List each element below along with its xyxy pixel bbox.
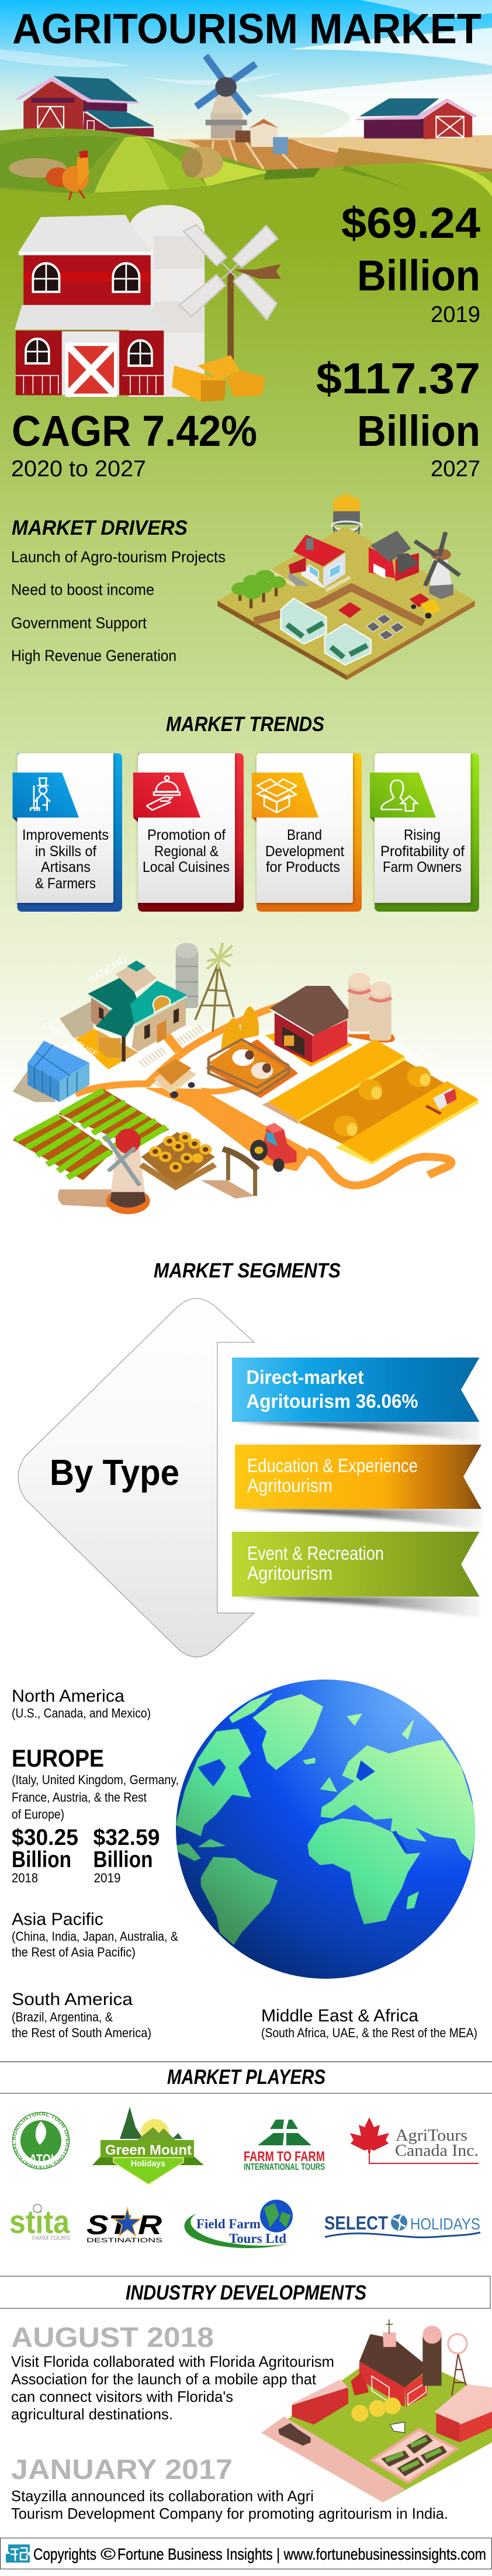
card text: for Products <box>266 859 340 875</box>
barn upper roof <box>18 215 152 252</box>
value 2019: $69.24 <box>341 199 480 247</box>
twin silos <box>348 973 395 1043</box>
logo: Farm to Farm: INTERNATIONAL TOURS <box>244 2162 325 2172</box>
card text: Brand <box>287 827 322 843</box>
region: asia pacific: (China, India, Japan, Australia, & <box>12 1929 178 1944</box>
greenhouse crops <box>287 623 367 657</box>
picket fences <box>141 1027 202 1064</box>
ribbon: direct-market: Direct-market <box>247 1366 364 1388</box>
logo: AgriTours Canada: AgriTours <box>396 2126 467 2145</box>
logo: Star Destinations: ST R <box>86 2210 162 2240</box>
region: europe: of Europe) <box>12 1807 64 1822</box>
card text: Improvements <box>22 827 109 843</box>
card text: Profitability of <box>380 843 465 860</box>
development: January 2017: JANUARY 2017 <box>11 2454 233 2485</box>
region: asia pacific: the Rest of Asia Pacific) <box>12 1945 136 1959</box>
grass plot <box>261 2347 492 2502</box>
heading: market trends: MARKET TRENDS <box>166 713 324 736</box>
region: middle east and africa <box>261 2006 477 2040</box>
cow <box>390 2422 405 2433</box>
wooden arch <box>201 1148 257 1199</box>
distant house <box>235 119 288 154</box>
europe value 2018: 2018 <box>12 1871 38 1885</box>
ribbon: education and experience: Education & Experience <box>247 1455 418 1476</box>
solar panels <box>366 614 405 640</box>
sunflower crate <box>141 1132 215 1187</box>
red tractor <box>351 2373 369 2395</box>
logo: Green Mount Holidays: Green Mount <box>105 2142 192 2158</box>
ribbon: direct-market <box>232 1358 479 1443</box>
region: middle east and africa: Middle East & Africa <box>261 2006 418 2026</box>
logo: Farm to Farm <box>244 2120 325 2172</box>
logo: Field Farm Tours: Tours Ltd <box>229 2231 286 2246</box>
hay rolls <box>9 147 223 178</box>
silo <box>129 205 205 397</box>
yellow tractor <box>410 593 441 619</box>
orange paths <box>75 1003 451 1186</box>
region: north america: (U.S., Canada, and Mexico) <box>12 1706 151 1720</box>
vegetable beds <box>12 1089 169 1180</box>
card face <box>375 753 471 903</box>
card back <box>18 753 122 912</box>
red barn <box>369 531 419 581</box>
illustration: small farm <box>261 2319 492 2502</box>
picket fence <box>270 571 350 590</box>
logo: Select Holidays: HOLIDAYS <box>410 2215 480 2233</box>
farm base <box>217 526 474 676</box>
logo: AgriTours Canada <box>350 2117 479 2163</box>
card text: Artisans <box>41 859 91 875</box>
water tower <box>332 493 362 550</box>
logo: Farm to Farm: FARM TO FARM <box>244 2149 325 2165</box>
region: south america <box>12 1990 151 2040</box>
dirt path <box>254 587 424 623</box>
card back <box>375 753 479 912</box>
hay rolls <box>351 2397 401 2422</box>
region: south america: the Rest of South America) <box>12 2026 151 2040</box>
clouds <box>0 0 492 138</box>
tag with person and house icon <box>370 773 436 822</box>
lattice windpump <box>195 943 234 1031</box>
ribbon: education and experience: Agritourism <box>247 1475 332 1496</box>
distant windmill <box>196 56 256 139</box>
foreground ground <box>0 163 492 236</box>
haystacks <box>221 1006 259 1050</box>
isometric farm illustration <box>217 493 474 680</box>
market drivers list: Need to boost income <box>11 581 154 598</box>
copyright text: © <box>101 2545 116 2563</box>
europe value 2019: Billion <box>93 1847 153 1872</box>
logo: AgriTours Canada: Canada Inc. <box>395 2141 479 2160</box>
pickup truck <box>278 2423 311 2446</box>
card text: Promotion of <box>147 827 226 843</box>
region: south america: (Brazil, Argentina, & <box>12 2010 113 2024</box>
white ground <box>12 1026 480 1206</box>
logo: Select Holidays: SELECT <box>324 2213 388 2234</box>
green hill <box>0 128 282 200</box>
region: asia pacific: Asia Pacific <box>12 1910 103 1929</box>
orchard <box>231 570 286 608</box>
farmhouse <box>289 535 345 588</box>
logo: ATOI: AGRICULTURAL TOUR OPERATORS INTERNATIONAL <box>13 2112 69 2169</box>
heading: industry developments: INDUSTRY DEVELOPMENTS <box>126 2281 366 2304</box>
region: europe: (Italy, United Kingdom, Germany, <box>12 1772 179 1787</box>
left barn with solar roof <box>15 76 154 137</box>
card text <box>380 827 465 875</box>
sky <box>0 0 492 154</box>
europe value 2018 <box>12 1825 78 1885</box>
market drivers list: High Revenue Generation <box>11 647 176 664</box>
greenhouse <box>12 1041 89 1102</box>
right barn <box>435 2384 492 2442</box>
card back <box>138 753 244 912</box>
right barn with solar roof <box>356 98 477 139</box>
logo: Field Farm Tours: Field Farm <box>196 2217 261 2231</box>
card text: Regional & <box>154 843 219 860</box>
brown barn <box>265 986 353 1067</box>
panel: by type diamond <box>18 1299 254 1657</box>
value 2019: Billion <box>357 251 480 300</box>
CAGR: CAGR 7.42% <box>12 407 257 455</box>
logo: Field Farm Tours <box>184 2200 293 2248</box>
isometric windmill <box>415 532 460 599</box>
greenhouses <box>281 598 371 665</box>
hay bales on field <box>334 1067 431 1137</box>
development: August 2018: Visit Florida collaborated with Florida Agritourism <box>11 2353 334 2370</box>
card face <box>138 753 235 903</box>
faint label: greenhouse: GREENHOUSE <box>41 1020 100 1060</box>
region: europe: France, Austria, & the Rest <box>12 1790 147 1805</box>
ribbon: direct-market: Agritourism 36.06% <box>247 1390 418 1412</box>
continents <box>174 1693 477 1945</box>
development: January 2017: Stayzilla announced its collaboration with Agri <box>11 2487 314 2505</box>
development: January 2017: Tourism Development Company for promoting agritourism in India. <box>11 2505 448 2522</box>
card text: in Skills of <box>35 843 96 860</box>
market drivers list: Government Support <box>11 614 147 632</box>
big red barn and silo illustration <box>15 205 281 401</box>
development: August 2018 <box>11 2322 334 2423</box>
wind pump <box>448 2334 467 2395</box>
development: August 2018: AUGUST 2018 <box>11 2322 214 2353</box>
europe value 2019 <box>93 1825 160 1885</box>
card text: Local Cuisines <box>143 859 230 875</box>
red planters <box>338 603 362 618</box>
faint label: field: FIELD <box>414 1043 437 1061</box>
rooster <box>46 150 89 200</box>
footer bar <box>0 2538 492 2569</box>
title: AGRITOURISM MARKET <box>12 6 481 53</box>
weather windmill <box>179 224 281 361</box>
panel: trend card 4 <box>370 753 479 912</box>
development: August 2018: can connect visitors with Florida's <box>11 2388 233 2405</box>
tag with box icon <box>252 773 318 822</box>
hay bales <box>172 355 265 401</box>
region: europe: EUROPE <box>12 1744 104 1772</box>
barn lower storey <box>16 331 164 395</box>
crate wagon <box>154 1059 196 1098</box>
barn windows <box>26 264 152 366</box>
vegetable garden <box>372 2429 456 2482</box>
grey silo <box>176 943 198 1008</box>
logo: Green Mount Holidays: Holidays <box>131 2159 165 2169</box>
combine harvester <box>426 1088 456 1114</box>
hudson bay and inland seas <box>198 1759 408 1853</box>
europe value 2019: 2019 <box>93 1871 120 1885</box>
europe value 2018: $30.25 <box>12 1825 78 1850</box>
market drivers list: Launch of Agro-tourism Projects <box>11 548 226 566</box>
orange pad behind cow pen <box>206 1040 298 1098</box>
tag with cloche icon <box>133 773 200 822</box>
card face <box>18 753 113 903</box>
region: europe <box>12 1744 179 1885</box>
tag with farmer icon <box>13 773 79 822</box>
card text: & Farmers <box>35 875 96 892</box>
value 2027 <box>316 354 480 482</box>
value 2019 <box>341 199 480 327</box>
card back <box>257 753 362 912</box>
panel: trend card 2 <box>133 753 244 912</box>
barn lower roof <box>15 305 168 330</box>
value 2027: 2027 <box>431 456 480 482</box>
region: north america: North America <box>12 1687 124 1706</box>
card text: Farm Owners <box>383 859 462 875</box>
logo: Select Holidays <box>324 2213 480 2238</box>
cow pen <box>209 1040 289 1094</box>
ribbon: event and recreation: Agritourism <box>247 1563 332 1584</box>
ribbon: event and recreation <box>232 1532 479 1618</box>
development: August 2018: Association for the launch of a mobile app that <box>11 2370 317 2388</box>
card text <box>22 827 109 892</box>
large isometric farm illustration <box>12 943 480 1214</box>
ribbon: event and recreation: Event & Recreation <box>247 1543 384 1564</box>
footer logo <box>6 2544 30 2563</box>
panel: trend card 1 <box>13 753 122 912</box>
development: January 2017 <box>11 2454 448 2522</box>
dark silo <box>422 2326 442 2386</box>
red barn <box>359 2319 430 2407</box>
card text <box>265 827 344 875</box>
heading: market players: MARKET PLAYERS <box>167 2066 325 2089</box>
hero landscape illustration <box>0 0 492 236</box>
region: asia pacific <box>12 1910 178 1959</box>
heading: market segments: MARKET SEGMENTS <box>154 1259 341 1282</box>
diamond label: By Type <box>50 1453 179 1493</box>
far fields <box>167 135 492 174</box>
barn upper storey <box>23 253 151 305</box>
faint label: ranch: RANCHO <box>86 953 129 986</box>
value 2019: 2019 <box>431 302 480 327</box>
copyright text: Copyrights <box>33 2545 96 2563</box>
ribbon: education and experience <box>235 1445 481 1531</box>
logo: Stita: stita <box>9 2203 70 2240</box>
logo: Green Mount Holidays <box>92 2107 204 2184</box>
CAGR: 2020 to 2027 <box>11 456 146 482</box>
europe value 2018: Billion <box>12 1847 71 1872</box>
europe value 2019: $32.59 <box>93 1825 160 1850</box>
stable <box>292 2379 350 2425</box>
barn door <box>62 331 119 395</box>
market drivers list <box>11 548 226 664</box>
card face <box>257 753 353 903</box>
CAGR <box>11 407 257 482</box>
heading: market drivers: MARKET DRIVERS <box>12 517 188 539</box>
panel: trend card 3 <box>252 753 362 912</box>
card text: Development <box>265 843 344 860</box>
logo: Star Destinations <box>86 2208 162 2244</box>
value 2027: $117.37 <box>316 354 480 403</box>
value 2027: Billion <box>357 407 480 455</box>
white windmill <box>58 1128 150 1214</box>
ranch house <box>60 961 188 1069</box>
region: north america <box>12 1687 151 1720</box>
pink road <box>261 2416 405 2502</box>
region: south america: South America <box>12 1990 133 2009</box>
globe <box>174 1680 477 1979</box>
logo: ATOI: ATOI <box>29 2152 54 2168</box>
logo: Star Destinations: DESTINATIONS <box>86 2237 162 2244</box>
development: August 2018: agricultural destinations. <box>11 2405 173 2423</box>
yellow and brown crop fields <box>262 1040 479 1165</box>
red tractor <box>250 1123 296 1172</box>
card text: Rising <box>404 827 441 843</box>
logo: Stita: FARM TOURS <box>32 2235 70 2242</box>
card text <box>143 827 230 875</box>
